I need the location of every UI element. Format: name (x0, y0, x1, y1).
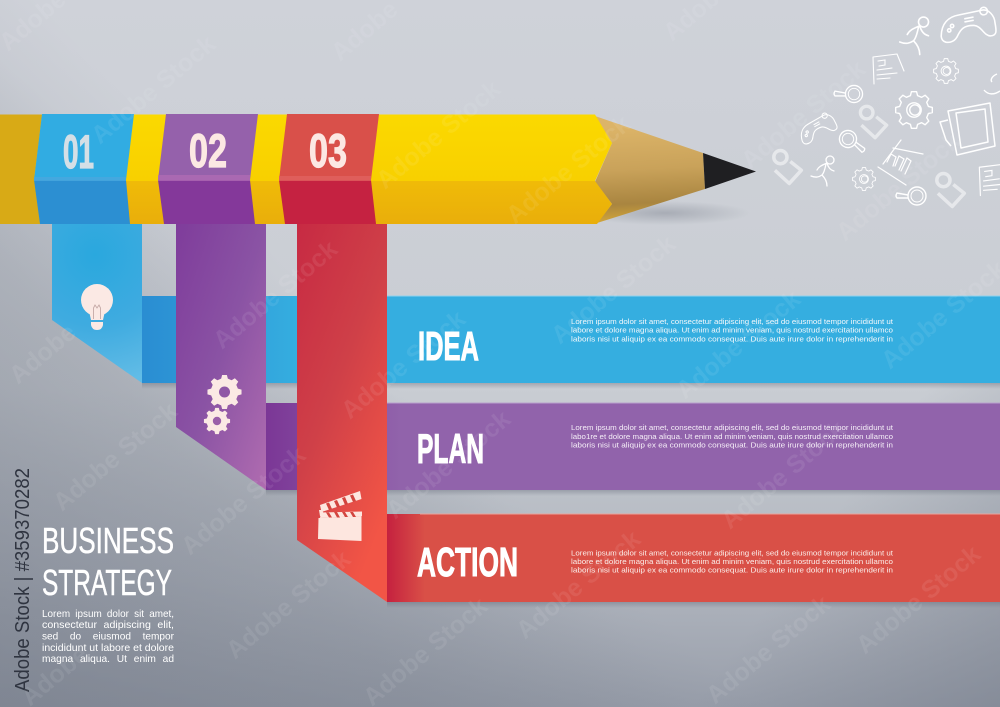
text block: action: laboris nisi ut aliquip ex ea commodo consequat. Duis aute irure dolor in reprehenderit in (571, 566, 893, 574)
icon: game controller (939, 7, 997, 43)
pencil wood cone (595, 116, 705, 223)
icon: clapperboard (318, 491, 362, 541)
band: purple 02: 02 (189, 124, 227, 177)
pencil dark left end (0, 114, 42, 224)
panel: action horizontal ribbon (387, 514, 1000, 608)
text block: plan: Lorem ipsum dolor sit amet, consectetur adipiscing elit, sed do eiusmod tempor incididunt ut (571, 423, 894, 432)
text block: action (571, 548, 894, 574)
text block: idea: labore et dolore magna aliqua. Ut enim ad minim veniam, quis nostrud exercitation ullamco (571, 326, 893, 334)
watermarks: Adobe Stock (371, 75, 506, 195)
icon: magnifier lower (836, 127, 869, 157)
text block: business strategy description: sed do eiusmod tempor (42, 632, 175, 642)
icon: monitor (940, 103, 995, 155)
icon: small game controller (796, 110, 839, 145)
title: business strategy (42, 520, 174, 603)
heading: PLAN: PLAN (417, 425, 484, 472)
text block: business strategy description: magna aliqua. Ut enim ad (42, 654, 174, 665)
watermarks: Adobe Stock (381, 405, 516, 525)
pencil body top face (0, 114, 612, 181)
icon: light bulb (81, 284, 113, 330)
text block: business strategy description: incididunt ut labore et dolore (42, 643, 174, 654)
panel: idea horizontal ribbon (142, 296, 1000, 389)
pencil shadow (580, 201, 750, 225)
watermarks: Adobe Stock (208, 235, 343, 355)
text block: idea: Lorem ipsum dolor sit amet, consectetur adipiscing elit, sed do eiusmod tempor incididunt ut (571, 317, 894, 326)
watermarks: Adobe Stock (511, 525, 646, 645)
text block: action: Lorem ipsum dolor sit amet, consectetur adipiscing elit, sed do eiusmod tempor incididunt ut (571, 548, 894, 558)
watermarks: Adobe Stock (221, 545, 356, 665)
watermarks: Adobe Stock (86, 30, 221, 150)
icon: person faded (774, 150, 801, 184)
pencil body lower face (0, 181, 612, 224)
title: business strategy: BUSINESS (42, 520, 174, 561)
band: blue 01: 01 (63, 125, 94, 178)
watermarks: Adobe Stock (701, 590, 836, 707)
doodle icons cloud (774, 7, 1000, 207)
icon: list chart (873, 54, 904, 84)
text block: plan (571, 423, 894, 450)
band: blue 01 (34, 114, 134, 224)
watermarks: Adobe Stock (716, 415, 851, 535)
text block: idea (571, 317, 894, 344)
icon: magnifier far (896, 187, 926, 205)
heading: ACTION: ACTION (417, 539, 518, 585)
icon: growth chart (878, 140, 923, 185)
heading: IDEA: IDEA (418, 323, 479, 369)
text block: idea: laboris nisi ut aliquip ex ea commodo consequat. Duis aute irure dolor in reprehenderit in (571, 334, 893, 344)
text block: business strategy description: consectetur adipiscing elit, (42, 620, 174, 631)
watermarks: Adobe Stock (176, 441, 311, 561)
icon: magnifier (834, 85, 863, 103)
watermarks: Adobe Stock (671, 285, 806, 405)
watermarks: Adobe Stock (546, 230, 681, 350)
icon: small gear (934, 59, 958, 83)
text block: business strategy description (42, 609, 175, 665)
vertical stock id: Adobe Stock | #359370282 (12, 468, 34, 692)
text block: action: labore et dolore magna aliqua. Ut enim ad minim veniam, quis nostrud exercitation ullamco (571, 557, 893, 566)
gear holes (213, 386, 230, 425)
watermarks: Adobe Stock (736, 55, 871, 175)
panel: plan horizontal ribbon (266, 402, 1000, 496)
panel: blue vertical ribbon (52, 224, 142, 383)
band: red 03: 03 (309, 124, 347, 177)
panel: purple vertical ribbon (176, 224, 266, 490)
band: purple 02 (158, 114, 258, 224)
icon: large gear (896, 92, 932, 128)
text block: plan: labo1re et dolore magna aliqua. Ut enim ad minim veniam, quis nostrud exercitation ullamco (571, 432, 893, 441)
title: business strategy: STRATEGY (42, 562, 172, 603)
icon: runner lower (811, 156, 834, 186)
icon: gear lower (853, 168, 875, 190)
icon: partial doodle at edge (984, 74, 1000, 94)
icon: list right (979, 164, 1000, 196)
text block: plan: laboris nisi ut aliquip ex ea commodo consequat. Duis aute irure dolor in reprehenderit in (571, 440, 893, 450)
icon: upper gear (207, 375, 242, 409)
watermarks: Adobe Stock (831, 127, 966, 247)
watermarks: Adobe Stock (501, 110, 636, 230)
icon: person (860, 106, 887, 138)
icon: person right (937, 174, 964, 206)
watermarks: Adobe (4, 318, 82, 390)
icon: lower gear (204, 408, 230, 434)
text block: business strategy description: Lorem ipsum dolor sit amet, (42, 609, 174, 620)
watermarks: Adobe Stock (48, 397, 183, 517)
icon: runner (900, 17, 928, 54)
pencil (0, 114, 756, 225)
watermarks: Adobe Stock (851, 540, 986, 660)
watermarks: Adobe Stock (336, 305, 471, 425)
band: red 03 (279, 114, 379, 224)
pencil lead tip (703, 153, 756, 189)
panel: red vertical ribbon (297, 224, 387, 602)
